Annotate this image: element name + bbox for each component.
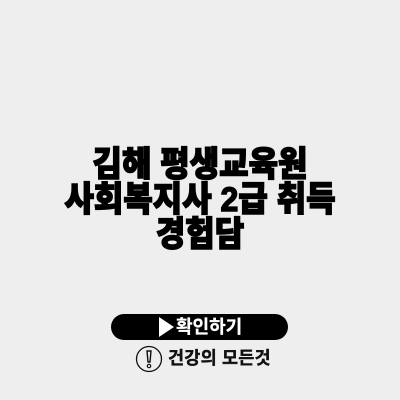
brand text: 건강의 모든것	[168, 348, 271, 368]
icon: play triangle	[159, 317, 174, 337]
title: 김해 평생교육원	[92, 145, 307, 183]
icon: exclamation circle	[136, 346, 162, 372]
title	[64, 145, 336, 253]
button label: 확인하기	[176, 317, 242, 337]
button: 확인하기	[111, 314, 288, 340]
title: 사회복지사 2급 취득	[64, 180, 336, 218]
title: 경험담	[156, 215, 244, 253]
